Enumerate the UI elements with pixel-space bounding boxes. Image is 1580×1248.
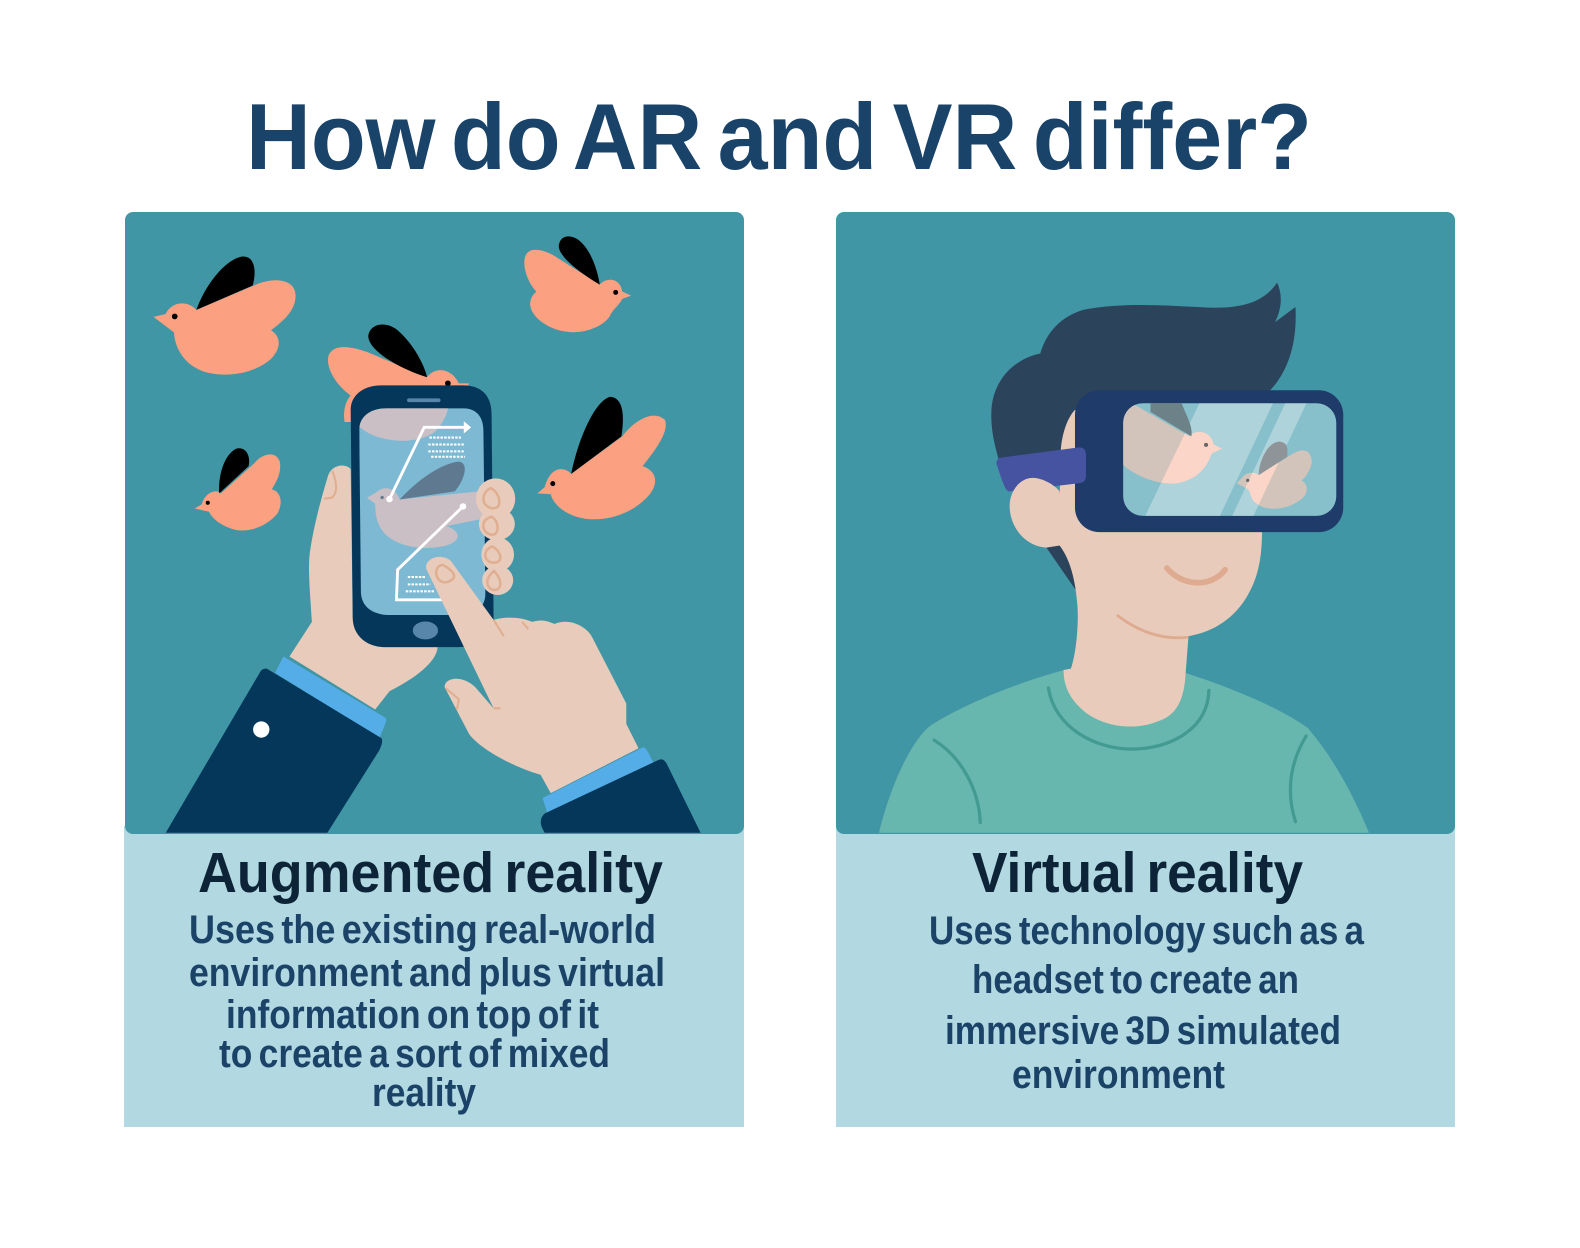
panel: virtual reality (836, 212, 1455, 1127)
right hand (426, 557, 639, 793)
illustration background: virtual reality (836, 212, 1455, 834)
caption background: augmented reality (124, 826, 744, 1127)
ear (1010, 478, 1067, 548)
illustration: person wearing VR headset (879, 283, 1369, 833)
description: virtual reality: Uses technology such as a (929, 909, 1365, 953)
description: virtual reality (929, 909, 1365, 1097)
heading: virtual reality: Virtual reality (972, 841, 1303, 905)
face and neck (1059, 410, 1262, 727)
heading: augmented reality: Augmented reality (198, 841, 663, 905)
description: virtual reality: environment (1012, 1053, 1225, 1097)
phone screen (357, 406, 487, 618)
phone (351, 385, 494, 647)
caption background: virtual reality (836, 826, 1455, 1127)
description: virtual reality: headset to create an (972, 958, 1299, 1002)
description: augmented reality: to create a sort of mixed (219, 1032, 610, 1076)
callout lines on screen (389, 427, 465, 600)
shirt (879, 669, 1369, 833)
icon: bird top right (524, 236, 631, 332)
icon: bird behind phone (328, 325, 469, 422)
description: augmented reality: environment and plus virtual (189, 951, 665, 995)
thumb nail (324, 471, 336, 499)
icon: bird right (537, 397, 666, 519)
illustration background: augmented reality (125, 212, 744, 834)
description: augmented reality: information on top of it (226, 993, 599, 1037)
description: augmented reality: Uses the existing real-world (189, 908, 656, 952)
hair (991, 283, 1296, 590)
description: augmented reality: reality (372, 1071, 477, 1115)
title: How do AR and VR differ? (246, 84, 1312, 189)
icon: bird top left (153, 256, 296, 375)
left sleeve (166, 657, 386, 833)
left hand (289, 466, 438, 710)
VR headset (1075, 390, 1343, 532)
headset lens with birds (1123, 402, 1312, 516)
headset strap (996, 447, 1086, 491)
icon: bird small left (195, 448, 281, 531)
panel: augmented reality (124, 212, 744, 1127)
description: virtual reality: immersive 3D simulated (945, 1009, 1341, 1053)
fingers behind phone (476, 478, 515, 595)
illustration: hands holding phone with birds (153, 236, 701, 833)
infographic (124, 101, 1455, 1127)
description: augmented reality (189, 908, 665, 1115)
right sleeve (541, 747, 701, 833)
